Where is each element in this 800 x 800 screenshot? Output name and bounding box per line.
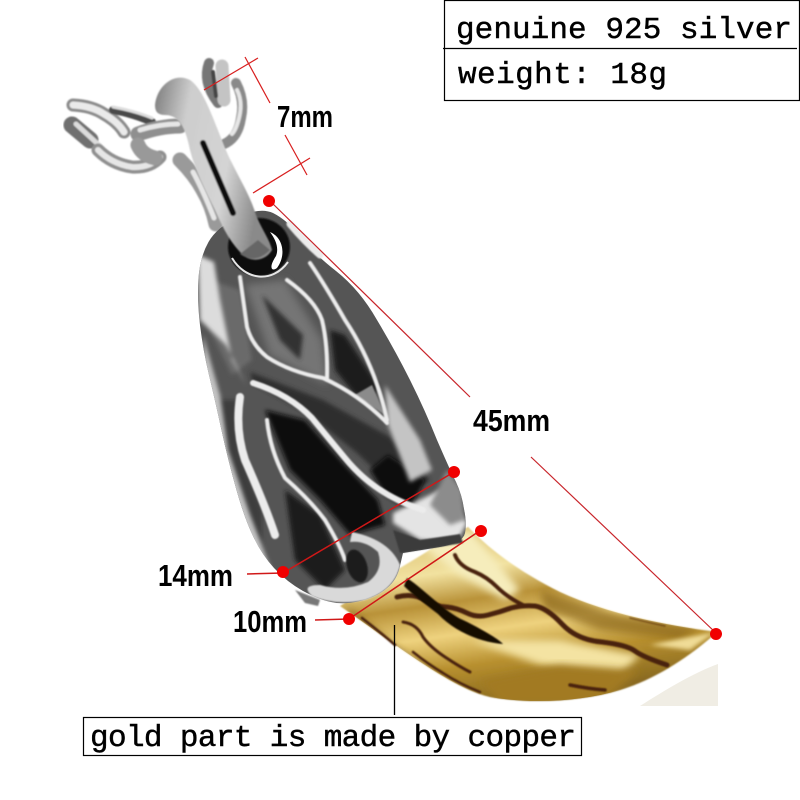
callout: material and weight box xyxy=(443,0,800,100)
icon: chain links xyxy=(72,63,242,224)
dimension: 7mm ring width xyxy=(204,57,310,193)
text: genuine 925 silver: genuine 925 silver xyxy=(456,13,792,48)
panel: pendant body xyxy=(155,78,718,706)
label: 7mm: 7mm xyxy=(277,99,333,134)
leader line: gold part xyxy=(394,625,396,715)
icon: silver bail xyxy=(155,78,272,260)
text: weight: weight: 18g xyxy=(458,58,667,93)
label: 45mm: 45mm xyxy=(473,403,550,438)
callout: gold part note: gold part is made by copper xyxy=(90,721,576,756)
icon: ghost reflection xyxy=(640,664,718,706)
icon: silver flame body xyxy=(198,211,467,606)
icon: gold tooth xyxy=(340,527,717,705)
dimension: 14mm width xyxy=(247,466,460,578)
label: 14mm: 14mm xyxy=(158,558,233,593)
dimension: 45mm length xyxy=(263,195,722,640)
lug hole xyxy=(228,218,290,276)
ring around lower hole xyxy=(308,532,400,602)
label: 10mm: 10mm xyxy=(233,604,307,639)
dimension: 10mm width xyxy=(315,525,487,625)
